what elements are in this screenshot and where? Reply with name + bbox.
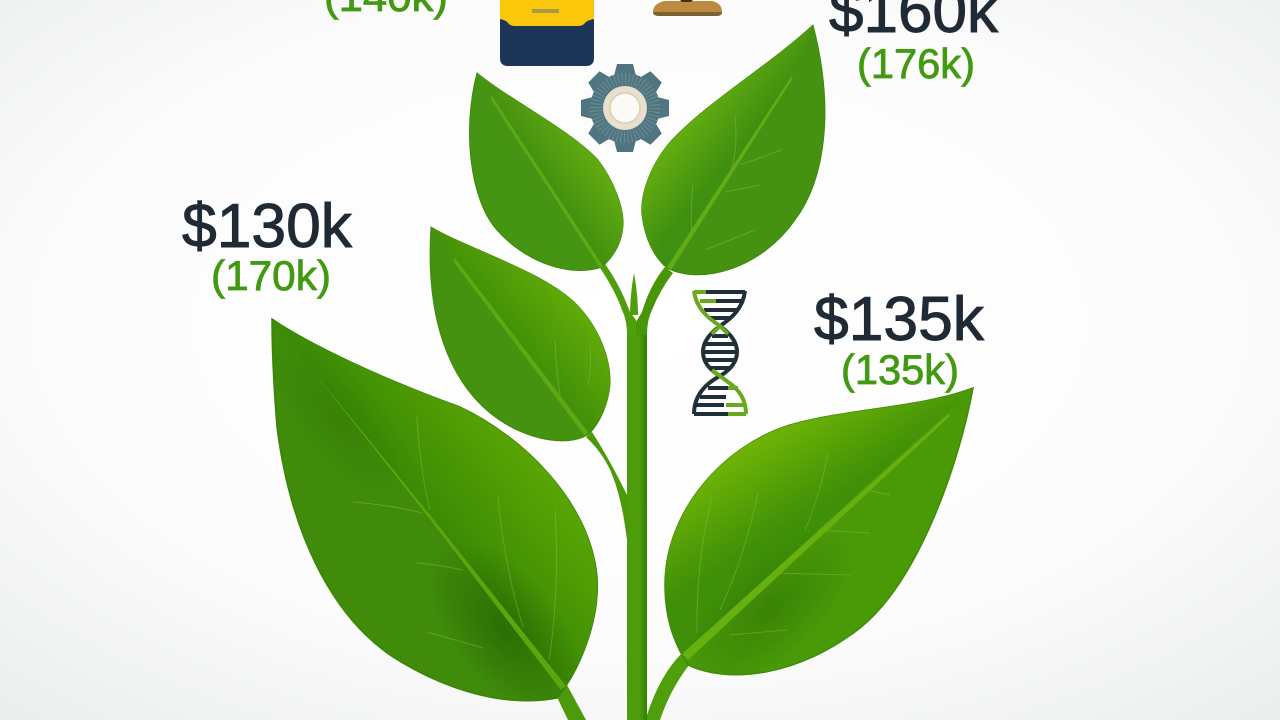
label: $135k (135k): (135k): [841, 346, 959, 393]
leaf: bottom right: [664, 386, 974, 676]
leaf: bottom left: [271, 318, 598, 702]
label: $135k (135k): [814, 285, 985, 393]
icon: folder or wallet: [500, 0, 594, 66]
label: $130k (170k): [182, 192, 353, 299]
label: $130k (170k): (170k): [211, 252, 331, 299]
plant stem and branches: [556, 264, 689, 720]
icon: gear: [581, 64, 669, 152]
label: $160k (176k): (176k): [857, 40, 975, 87]
leaf: top left: [470, 73, 623, 270]
leaf: top right: [642, 25, 825, 275]
icon: DNA helix: [694, 291, 746, 414]
label: $130k (170k): $130k: [182, 192, 353, 261]
label: $135k (135k): $135k: [814, 285, 985, 354]
icon: brown stamp base: [653, 0, 722, 16]
leaf: middle left: [430, 227, 610, 441]
label: $160k (176k): [829, 0, 999, 87]
